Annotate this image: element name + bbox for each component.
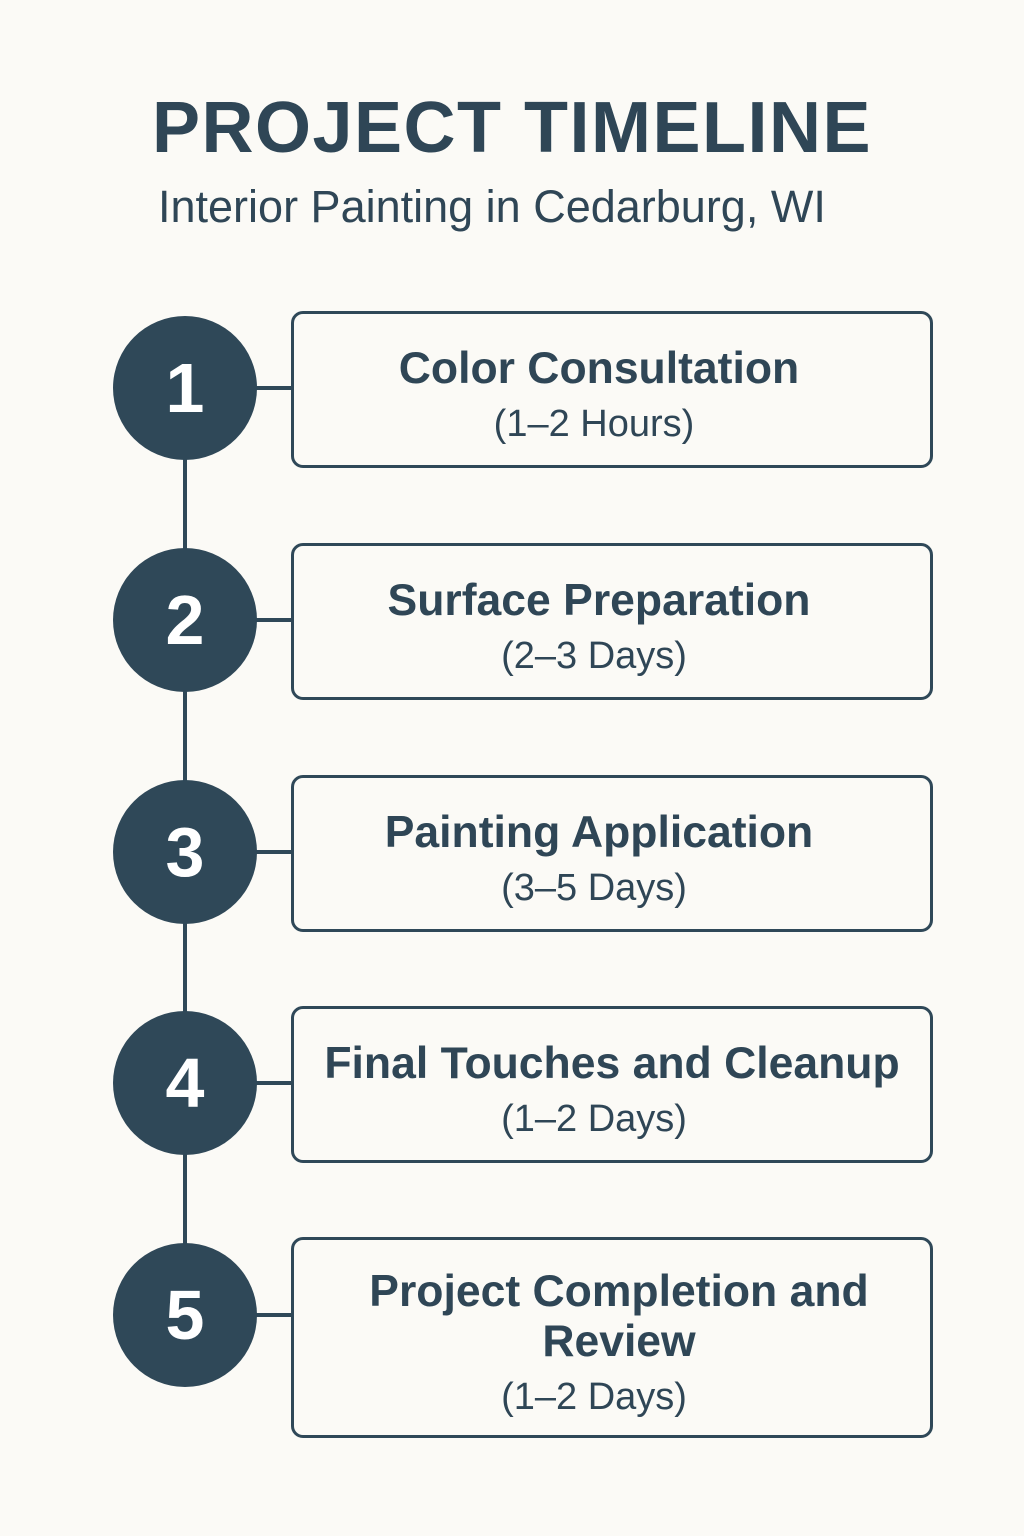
step 4: [113, 1006, 933, 1163]
step 1: (1–2 Hours): [494, 403, 694, 445]
step 5: 5: [166, 1276, 204, 1354]
step 1: [113, 311, 933, 468]
title: PROJECT TIMELINE: [152, 88, 872, 168]
step 5: [113, 1237, 933, 1438]
step 1: 1: [166, 349, 204, 427]
step 4: Final Touches and Cleanup: [324, 1039, 900, 1088]
step 3: [113, 775, 933, 932]
step 4: 4: [166, 1044, 204, 1122]
vertical timeline line: [183, 388, 187, 1315]
step 2: 2: [166, 581, 204, 659]
step 2: [113, 543, 933, 700]
step 5: Project Completion and: [369, 1267, 869, 1316]
step 1: Color Consultation: [399, 344, 799, 393]
step 3: (3–5 Days): [501, 867, 687, 909]
step 5: Review: [542, 1317, 696, 1366]
step 3: 3: [166, 813, 204, 891]
step 2: Surface Preparation: [388, 576, 810, 625]
subtitle: Interior Painting in Cedarburg, WI: [158, 181, 826, 232]
step 2: (2–3 Days): [501, 635, 687, 677]
step 4: (1–2 Days): [501, 1098, 687, 1140]
step 3: Painting Application: [385, 808, 813, 857]
step 5: (1–2 Days): [501, 1376, 687, 1418]
